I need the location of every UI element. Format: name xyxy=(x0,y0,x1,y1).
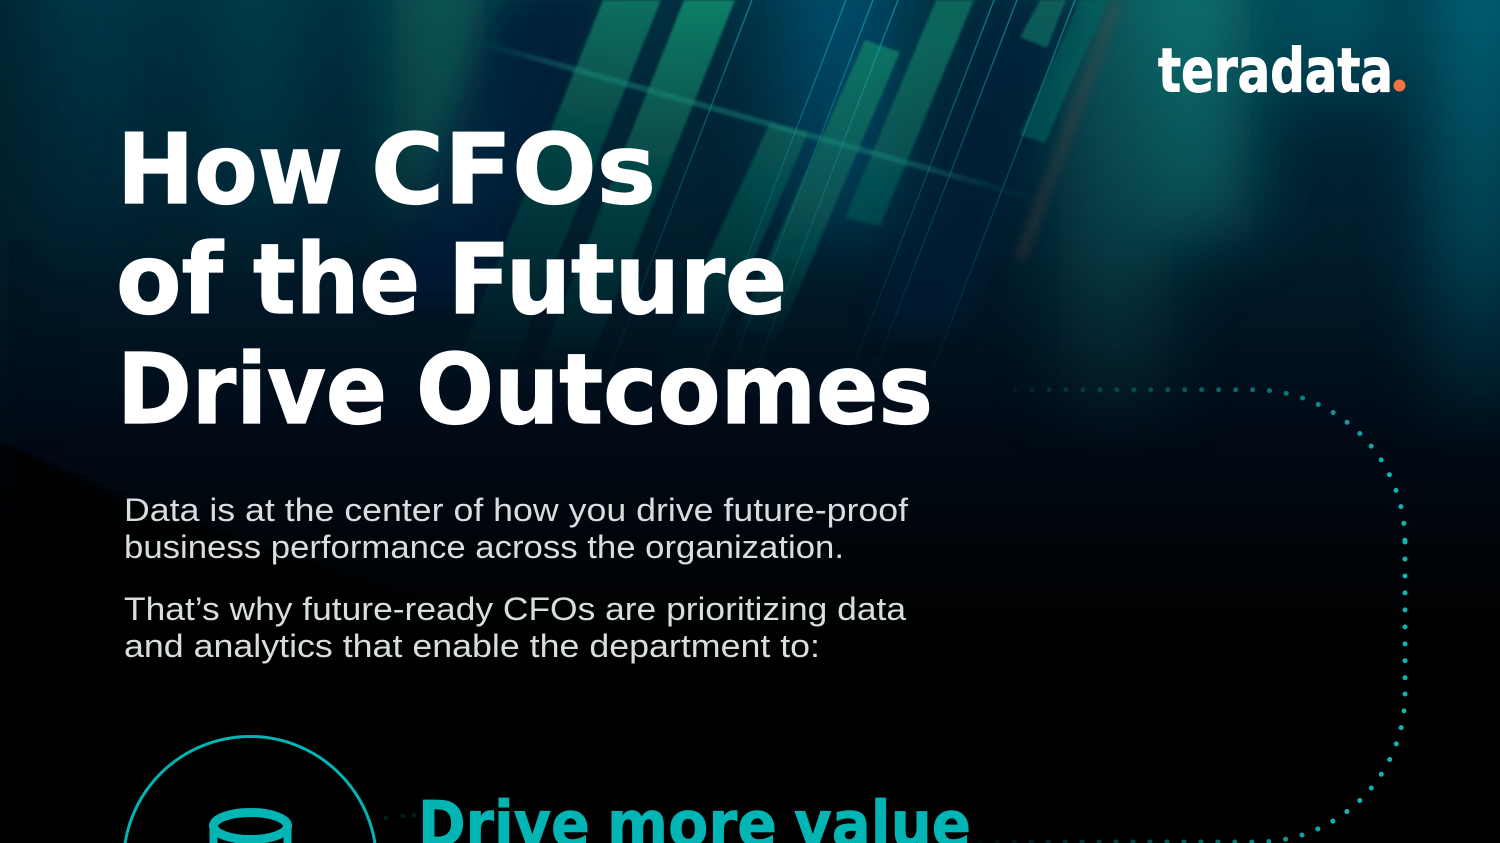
title: How xyxy=(117,113,343,226)
title: Future xyxy=(448,223,787,336)
intro text block xyxy=(124,492,908,565)
dotted connector path xyxy=(975,390,1405,842)
lead-in text block: That’s why future-ready CFOs are prioritizing data xyxy=(124,591,906,627)
intro text block: business performance across the organization. xyxy=(124,529,844,565)
crossing light streak xyxy=(470,40,1040,200)
title: Outcomes xyxy=(416,333,933,446)
icon: database in circle xyxy=(124,736,376,843)
title: CFOs xyxy=(371,113,656,226)
soft vertical light bands xyxy=(0,0,1500,418)
logo: teradata: teradata xyxy=(1158,36,1393,106)
intro text block: Data is at the center of how you drive future-proof xyxy=(124,492,908,528)
title: the xyxy=(253,223,420,336)
title: of xyxy=(116,223,225,336)
black lower left wedge xyxy=(0,441,420,700)
small connector dots xyxy=(384,812,416,820)
heading: drive more value xyxy=(418,788,971,843)
slanted green bars xyxy=(442,0,1108,400)
title xyxy=(116,113,933,446)
reddish streak xyxy=(1020,0,1118,260)
dark navy zone behind bars xyxy=(380,0,600,300)
lead-in text block xyxy=(124,591,906,664)
thin slanted light lines xyxy=(600,0,1075,395)
lead-in text block: and analytics that enable the department to: xyxy=(124,628,820,664)
title: Drive xyxy=(117,333,387,446)
